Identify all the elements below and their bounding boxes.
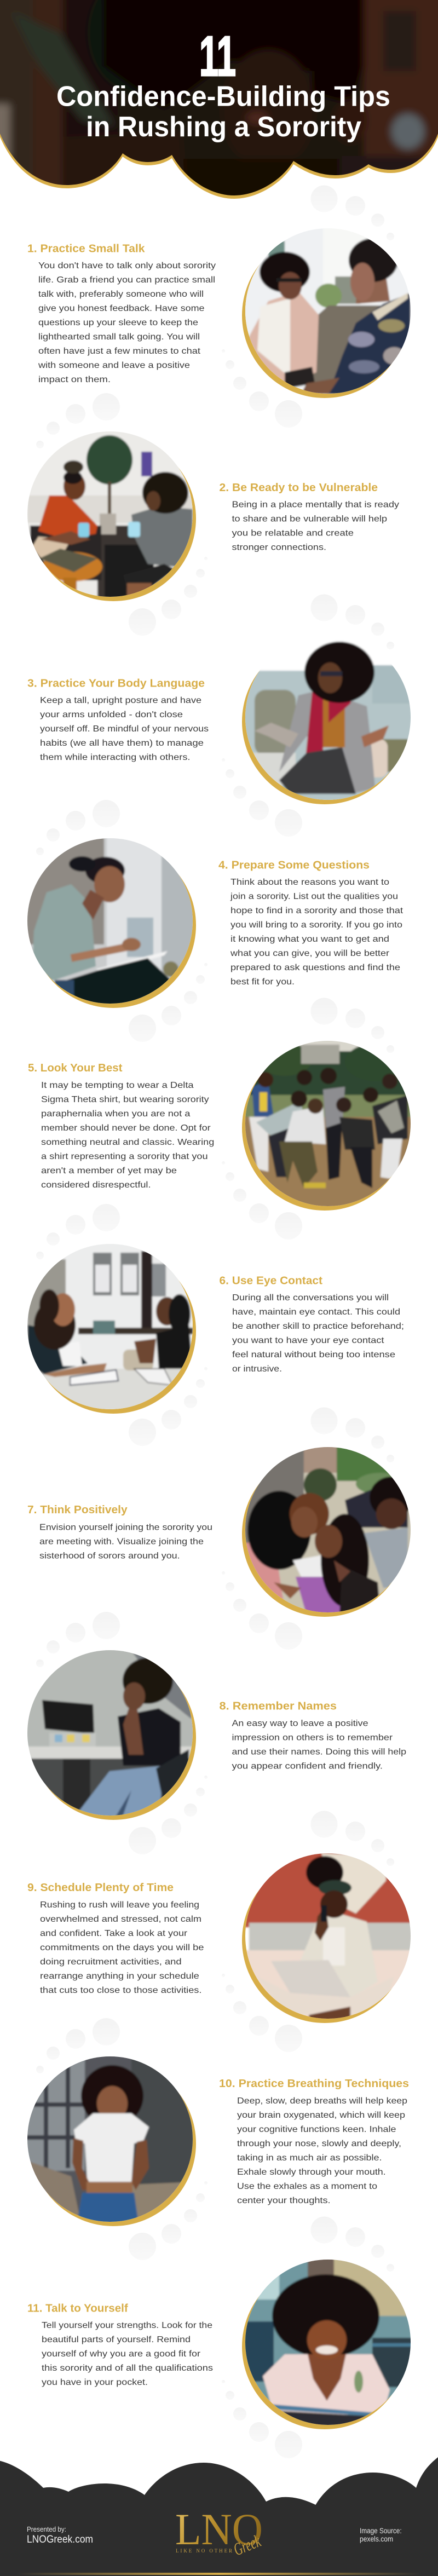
body text: Rushing to rush will leave you feeling: [40, 1900, 199, 1910]
body text: life. Grab a friend you can practice small: [38, 275, 215, 285]
body text: you will bring to a sorority. If you go into: [230, 920, 402, 930]
body text: [41, 1081, 214, 1190]
body text: feel natural without being too intense: [232, 1350, 395, 1359]
body text: often have just a few minutes to chat: [38, 347, 201, 356]
panel: tip 8: [22, 1645, 406, 1824]
body text: be another skill to practice beforehand;: [232, 1322, 404, 1331]
body text: [38, 261, 216, 384]
body text: you have in your pocket.: [42, 2378, 148, 2387]
body text: [40, 1900, 204, 1995]
body text: paraphernalia when you are not a: [41, 1109, 191, 1119]
photo: smiling woman in white top: [22, 2053, 197, 2231]
body text: doing recruitment activities, and: [40, 1957, 182, 1967]
photo: woman on phone with laptop: [241, 1851, 416, 2026]
body text: You don't have to talk only about sorority: [38, 261, 216, 270]
body text: join a sorority. List out the qualities you: [230, 892, 398, 901]
photo: smiling woman with curly hair: [241, 2256, 416, 2431]
logo: Greek: [230, 2531, 263, 2559]
panel: tip 2: [22, 427, 399, 602]
heading: 11. Talk to Yourself: [27, 2303, 128, 2315]
body text: [232, 1719, 406, 1771]
header photo: [0, 0, 438, 208]
body text: your arms unfolded - don't close: [40, 710, 183, 719]
body text: lighthearted small talk going. You will: [38, 332, 200, 342]
body text: overwhelmed and stressed, not calm: [40, 1915, 201, 1924]
body text: or intrusive.: [232, 1364, 282, 1374]
heading: 3. Practice Your Body Language: [27, 678, 205, 690]
heading: 4. Prepare Some Questions: [218, 860, 370, 872]
body text: Being in a place mentally that is ready: [232, 500, 399, 509]
presented by: [27, 2525, 93, 2545]
panel: tip 5: [28, 1038, 416, 1213]
body text: commitments on the days you will be: [40, 1943, 204, 1952]
body text: beautiful parts of yourself. Remind: [42, 2335, 191, 2344]
body text: taking in as much air as possible.: [237, 2153, 382, 2163]
photo: two women talking on sofa: [241, 224, 416, 400]
body text: to share and be vulnerable will help: [232, 515, 387, 523]
panel: tip 9: [27, 1851, 416, 2026]
body text: something neutral and classic. Wearing: [41, 1138, 214, 1147]
body text: [232, 1293, 404, 1374]
body text: prepared to ask questions and find the: [230, 963, 400, 972]
body text: [232, 500, 399, 552]
image source: [360, 2527, 402, 2543]
header: [0, 0, 438, 208]
title line 2: in Rushing a Sorority: [86, 111, 361, 143]
body text: you want to have your eye contact: [232, 1336, 384, 1345]
body text: Use the exhales as a moment to: [237, 2182, 377, 2191]
body text: Tell yourself your strengths. Look for the: [42, 2321, 212, 2330]
body text: that cuts too close to those activities.: [40, 1986, 201, 1995]
photo: two women at a table with notebooks: [22, 1240, 197, 1415]
body text: stronger connections.: [232, 543, 326, 552]
panel: tip 11: [27, 2256, 416, 2431]
body text: what you can give, you will be better: [230, 949, 390, 958]
heading: 2. Be Ready to be Vulnerable: [219, 482, 378, 494]
panel: tip 7: [27, 1443, 416, 1621]
photo: two women with coffee cups: [22, 427, 197, 602]
body text: Envision yourself joining the sorority you: [39, 1523, 212, 1532]
photo: friends laughing and hugging: [241, 1443, 416, 1621]
body text: and use their names. Doing this will help: [232, 1748, 406, 1756]
title number: 11: [199, 25, 236, 88]
body text: it knowing what you want to get and: [230, 935, 389, 944]
body text: habits (we all have them) to manage: [40, 739, 204, 748]
body text: you be relatable and create: [232, 529, 354, 538]
image source: pexels.com: [360, 2535, 393, 2543]
photo: woman in grey coat and red scarf: [242, 641, 411, 804]
body text: During all the conversations you will: [232, 1293, 389, 1303]
body text: questions up your sleeve to keep the: [38, 318, 198, 327]
heading: 5. Look Your Best: [28, 1062, 123, 1074]
body text: It may be tempting to wear a Delta: [41, 1081, 194, 1090]
panel: tip 3: [27, 630, 416, 808]
body text: Keep a tall, upright posture and have: [40, 696, 201, 705]
panel: tip 6: [22, 1240, 404, 1415]
body text: center your thoughts.: [237, 2196, 331, 2205]
photo: woman writing on clipboard: [22, 835, 197, 1010]
body text: a shirt representing a sorority that you: [41, 1152, 208, 1161]
logo: LIKE NO OTHER: [176, 2548, 232, 2554]
body text: are meeting with. Visualize joining the: [39, 1537, 204, 1546]
heading: 9. Schedule Plenty of Time: [27, 1882, 174, 1894]
body text: best fit for you.: [230, 977, 295, 987]
body text: Think about the reasons you want to: [230, 878, 389, 887]
body text: [40, 696, 209, 762]
heading: 1. Practice Small Talk: [27, 243, 145, 255]
body text: give you honest feedback. Have some: [38, 304, 205, 313]
panel: tip 4: [22, 835, 404, 1010]
footer: [0, 2457, 438, 2576]
body text: your cognitive functions keen. Inhale: [237, 2125, 396, 2134]
body text: with someone and leave a positive: [38, 361, 190, 370]
body text: yourself off. Be mindful of your nervous: [40, 724, 209, 734]
image source: Image Source:: [360, 2527, 402, 2535]
body text: [42, 2321, 213, 2387]
body text: you appear confident and friendly.: [232, 1762, 383, 1771]
body text: Exhale slowly through your mouth.: [237, 2168, 386, 2177]
body text: through your nose, slowly and deeply,: [237, 2139, 401, 2148]
heading: 8. Remember Names: [219, 1700, 337, 1712]
body text: rearrange anything in your schedule: [40, 1972, 199, 1981]
logo: LNO: [175, 2504, 263, 2554]
body text: impact on them.: [38, 375, 111, 384]
body text: An easy way to leave a positive: [232, 1719, 368, 1728]
presented by: Presented by:: [27, 2525, 66, 2533]
photo: woman thinking at desk: [22, 1645, 197, 1824]
body text: [237, 2096, 407, 2205]
body text: hope to find in a sorority and those that: [230, 906, 404, 915]
body text: impression on others is to remember: [232, 1733, 393, 1742]
heading: 6. Use Eye Contact: [219, 1275, 322, 1287]
photo: group of friends posing outdoors: [241, 1038, 416, 1213]
heading: 10. Practice Breathing Techniques: [219, 2078, 409, 2090]
panel: tip 10: [22, 2053, 409, 2231]
body text: yourself of why you are a good fit for: [42, 2349, 201, 2359]
body text: your brain oxygenated, which will keep: [237, 2111, 405, 2120]
body text: [39, 1523, 212, 1560]
body text: talk with, preferably someone who will: [38, 290, 204, 299]
heading: 7. Think Positively: [27, 1504, 128, 1516]
body text: have, maintain eye contact. This could: [232, 1307, 400, 1317]
body text: Deep, slow, deep breaths will help keep: [237, 2096, 407, 2106]
presented by: LNOGreek.com: [27, 2534, 93, 2545]
body text: considered disrespectful.: [41, 1180, 151, 1190]
body text: sisterhood of sorors around you.: [39, 1551, 180, 1560]
body text: [230, 878, 404, 987]
body text: this sorority and of all the qualifications: [42, 2364, 213, 2373]
body text: aren't a member of yet may be: [41, 1166, 177, 1175]
body text: and confident. Take a look at your: [40, 1929, 188, 1938]
title line 1: Confidence-Building Tips: [56, 81, 390, 113]
body text: Sigma Theta shirt, but wearing sorority: [41, 1095, 209, 1104]
body text: member should never be done. Opt for: [41, 1123, 211, 1133]
body text: them while interacting with others.: [40, 753, 191, 762]
panel: tip 1: [27, 224, 416, 400]
